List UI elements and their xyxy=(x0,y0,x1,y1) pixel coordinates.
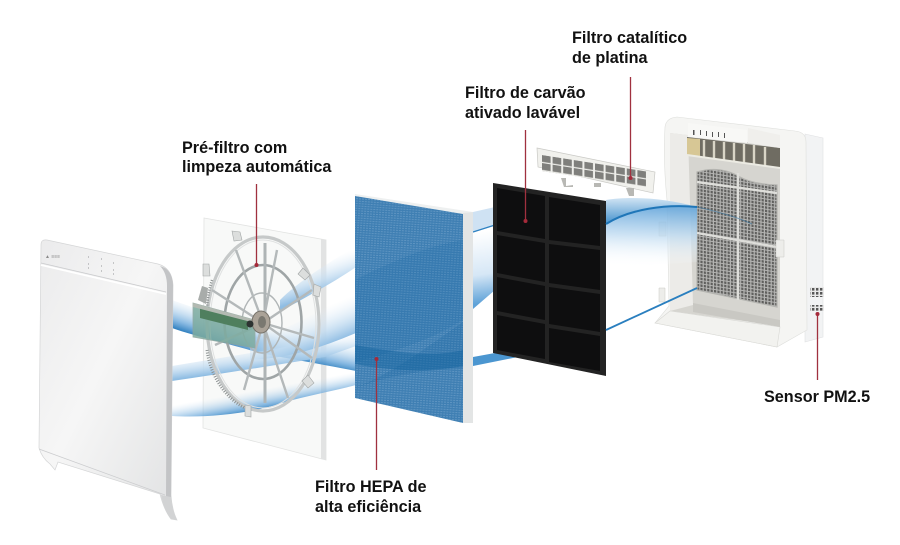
leader: HEPA filter xyxy=(374,357,378,470)
label: platinum catalytic filter: de platina xyxy=(572,49,649,67)
flow overlay on filter xyxy=(355,240,463,362)
label: pre-filter: limpeza automática xyxy=(182,158,332,176)
air flow ribbons xyxy=(172,207,518,416)
label: carbon filter: Filtro de carvão xyxy=(465,84,586,102)
leader: pre-filter xyxy=(254,184,258,267)
label: PM2.5 sensor: Sensor PM2.5 xyxy=(764,388,870,406)
hub xyxy=(252,311,270,333)
pre-filter back plate xyxy=(203,218,326,460)
control panel dots xyxy=(88,257,114,274)
main purifier unit xyxy=(655,117,824,347)
sensor vents xyxy=(810,287,824,311)
HEPA filter xyxy=(355,194,473,423)
front panel xyxy=(39,240,177,520)
clips xyxy=(203,231,321,417)
leader: carbon filter xyxy=(524,130,528,223)
side tabs xyxy=(659,222,784,302)
mesh grille xyxy=(697,169,777,307)
green cleaning unit xyxy=(193,303,255,348)
inner cavity xyxy=(670,133,780,326)
label: pre-filter: Pré-filtro com xyxy=(182,139,287,157)
leader: PM2.5 sensor xyxy=(816,312,820,380)
label: HEPA filter: alta eficiência xyxy=(315,498,422,516)
louvers xyxy=(687,137,780,168)
floor tray xyxy=(655,311,780,347)
top control strip xyxy=(688,123,747,143)
label: HEPA filter: Filtro HEPA de xyxy=(315,478,427,496)
wheel xyxy=(207,237,319,411)
leader: platinum filter xyxy=(628,77,632,180)
label: platinum catalytic filter: Filtro catalítico xyxy=(572,29,687,47)
platinum catalytic filter xyxy=(537,148,655,196)
air flow into unit xyxy=(606,198,752,330)
logo mark: ▲ ≡≡≡ xyxy=(45,254,60,260)
activated carbon filter xyxy=(493,183,606,376)
label: carbon filter: ativado lavável xyxy=(465,104,580,122)
pre-filter wheel mechanism xyxy=(193,231,321,417)
leader lines xyxy=(254,77,820,470)
